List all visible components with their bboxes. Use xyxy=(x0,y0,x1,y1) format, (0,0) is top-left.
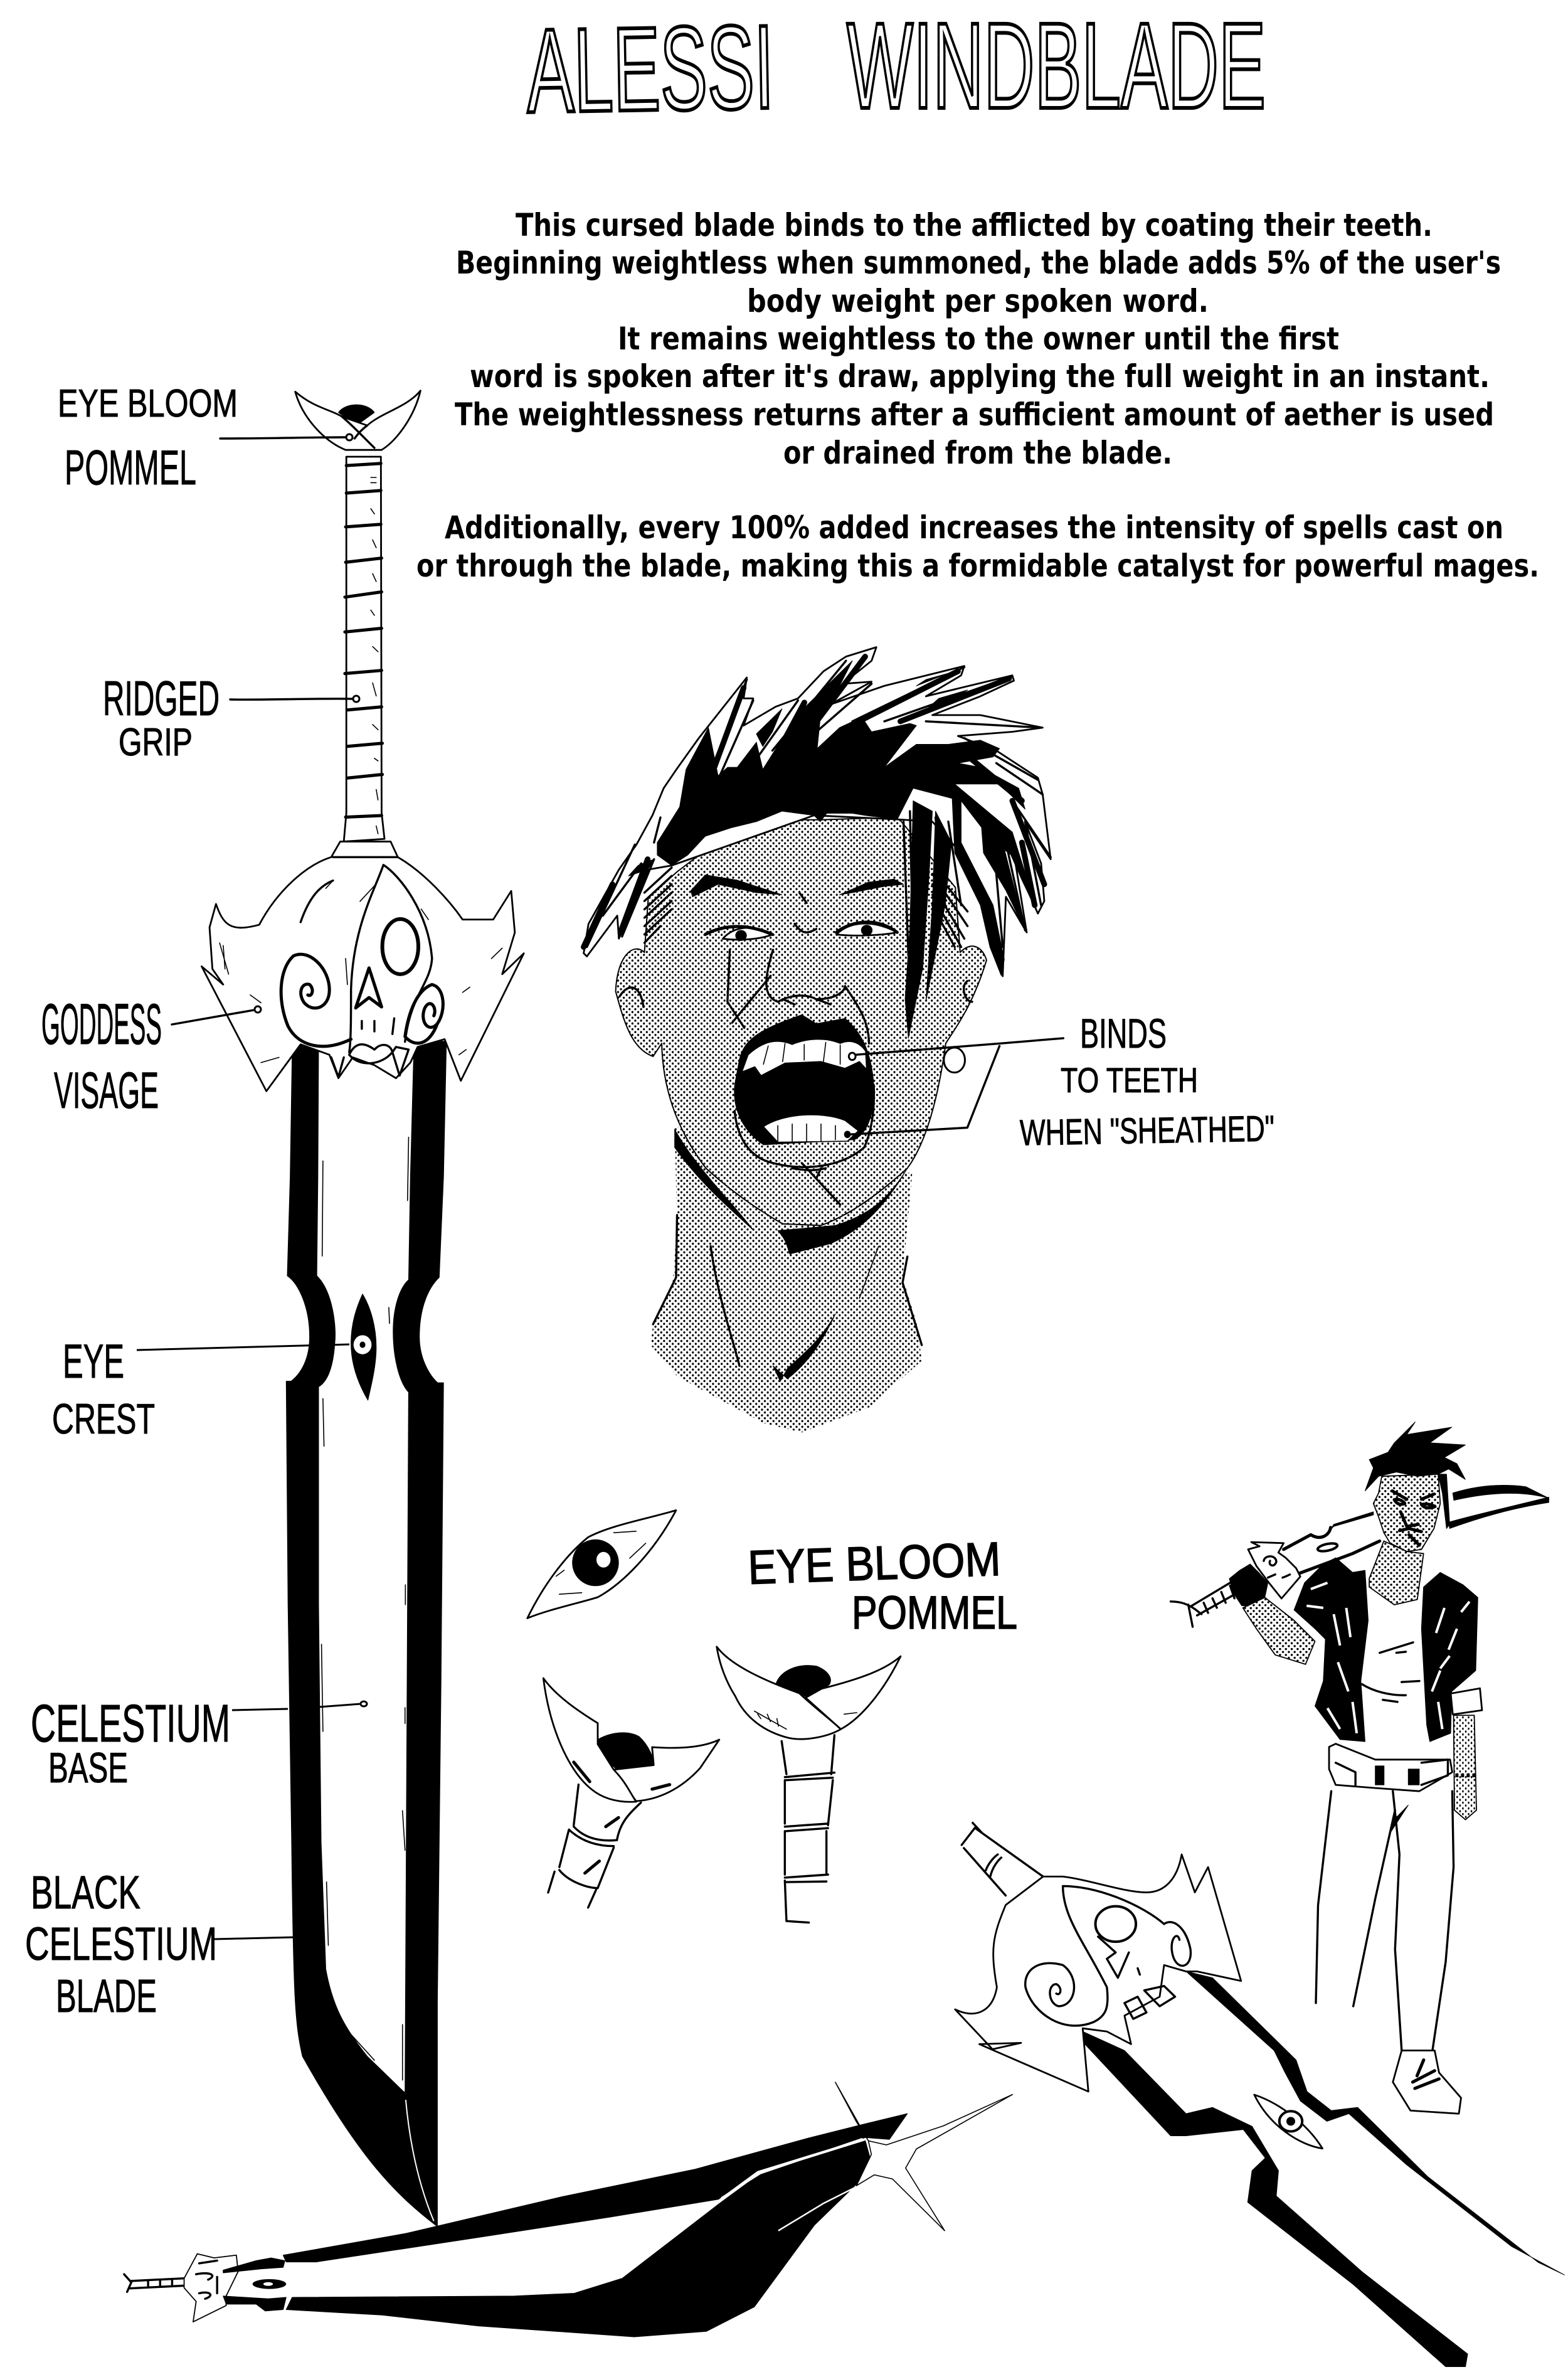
forearm skin xyxy=(1454,1715,1476,1820)
hair envelope xyxy=(584,647,1051,976)
raised arm skin xyxy=(1243,1597,1315,1664)
blade lower hooked edge xyxy=(286,1381,443,2226)
sleeve cuff xyxy=(1451,1688,1482,1715)
legs xyxy=(1316,1791,1454,2050)
label: binds to teeth when sheathed: WHEN "SHEATHED" xyxy=(1020,1108,1275,1154)
leader: grip xyxy=(230,696,359,702)
label: eye bloom pommel: EYE BLOOM xyxy=(58,382,238,425)
base scratches xyxy=(322,1137,408,2080)
standing character upper body xyxy=(1229,1422,1549,1742)
shaved side hatching xyxy=(645,868,968,947)
horizontal sword with star glint xyxy=(124,2082,1012,2337)
title xyxy=(526,0,1266,138)
sword grip in hand xyxy=(1170,1576,1247,1627)
sword guard xyxy=(1248,1542,1300,1598)
eye crest xyxy=(351,1294,376,1400)
lower teeth xyxy=(763,1115,859,1142)
label: black celestium blade: BLACK xyxy=(31,1866,140,1918)
star glint xyxy=(835,2082,1012,2231)
label: binds to teeth when sheathed xyxy=(1020,1010,1275,1154)
text block: description: body weight per spoken word. xyxy=(747,283,1209,319)
text: GODDESS xyxy=(41,992,162,1056)
label: goddess visage: VISAGE xyxy=(54,1062,159,1119)
wrist beads xyxy=(1455,1774,1476,1777)
eye bloom studies xyxy=(527,1510,901,1923)
heavy hair strokes xyxy=(584,657,1044,947)
label: ridged grip: RIDGED xyxy=(103,671,220,726)
text block: description: It remains weightless to the owner until the first xyxy=(618,321,1339,357)
ear lines xyxy=(620,981,972,1007)
left eyebrow xyxy=(691,875,782,897)
mini crest eye xyxy=(253,2279,286,2289)
text block: description xyxy=(416,207,1539,584)
guard mask line xyxy=(1063,1886,1164,2022)
gloved hand xyxy=(1229,1564,1268,1606)
side hair xyxy=(1438,1474,1449,1528)
right hanging strands xyxy=(905,784,1038,1038)
skull eye xyxy=(1096,1907,1136,1942)
standing character lower body xyxy=(1170,1576,1476,2114)
mini hilt xyxy=(124,2254,286,2322)
left swirl xyxy=(281,954,351,1046)
neck shadow under jaw xyxy=(675,1129,908,1254)
skin: neck xyxy=(650,1127,922,1432)
label: binds to teeth when sheathed: BINDS xyxy=(1080,1010,1167,1056)
leader: binds to teeth xyxy=(844,1038,1063,1138)
grip xyxy=(344,457,384,841)
black hair mass xyxy=(657,661,1025,866)
label: eye bloom pommel: POMMEL xyxy=(65,440,196,495)
right eyebrow xyxy=(840,879,904,895)
upper blade xyxy=(283,2114,908,2262)
label: eye crest: CREST xyxy=(52,1395,155,1443)
hair sketch lines xyxy=(587,661,1051,955)
leader: black blade xyxy=(215,1937,294,1939)
label: ridged grip xyxy=(103,671,220,764)
shirt lines xyxy=(1362,1642,1419,1702)
lower blade edge xyxy=(1083,2031,1468,2366)
blade right black edge upper xyxy=(393,1041,447,1392)
leader: celestium base xyxy=(232,1701,367,1710)
label: eye bloom pommel study xyxy=(747,1533,1017,1639)
upper teeth xyxy=(742,1040,867,1076)
head portrait xyxy=(616,817,1063,1432)
facial features xyxy=(1392,1491,1435,1545)
label: celestium base xyxy=(31,1694,230,1792)
nose and facial lines xyxy=(728,893,869,1043)
shouldered blade xyxy=(1284,1485,1549,1575)
label: black celestium blade: CELESTIUM xyxy=(25,1918,217,1970)
label: eye crest xyxy=(52,1335,155,1443)
upper blade edge xyxy=(1186,1971,1564,2275)
swirls xyxy=(1025,1963,1094,2026)
earring xyxy=(944,1048,965,1073)
blade tip highlight xyxy=(406,2100,434,2221)
label: ridged grip: GRIP xyxy=(119,721,193,764)
hilt: ridged grip, guard and pommel xyxy=(201,391,524,1091)
eye bloom pommel xyxy=(295,391,420,450)
skull eye socket xyxy=(383,919,418,974)
jacket left xyxy=(1294,1558,1368,1742)
label: goddess visage xyxy=(41,992,162,1119)
pommel study upright xyxy=(717,1647,901,1923)
label: celestium base: BASE xyxy=(48,1744,128,1792)
goddess visage guard xyxy=(201,841,524,1091)
main sword blade xyxy=(286,1041,447,2226)
label: eye bloom pommel study: EYE BLOOM xyxy=(747,1533,1002,1595)
jacket highlights xyxy=(1306,1583,1470,1733)
right swirl xyxy=(405,984,443,1043)
label: binds to teeth when sheathed: TO TEETH xyxy=(1061,1060,1198,1100)
label: black celestium blade xyxy=(25,1866,217,2022)
grip xyxy=(961,1823,1043,1896)
skin: face and ears xyxy=(616,817,987,1225)
mouth xyxy=(734,1015,874,1145)
lower blade xyxy=(286,2141,871,2337)
leader: pommel xyxy=(220,434,352,440)
title: WINDBLADE xyxy=(847,0,1266,134)
label: eye crest: EYE xyxy=(63,1335,124,1388)
face xyxy=(1374,1474,1440,1551)
large sword study lower right xyxy=(955,1823,1564,2366)
label: black celestium blade: BLADE xyxy=(56,1970,157,2022)
pommel study tilted xyxy=(543,1678,719,1908)
label: eye bloom pommel study: POMMEL xyxy=(852,1587,1017,1639)
tooth marks xyxy=(763,1043,840,1141)
neck lines xyxy=(653,1215,922,1366)
upper strand fills xyxy=(628,673,968,876)
neck xyxy=(1369,1541,1424,1605)
loose eye study xyxy=(527,1510,676,1618)
jaw and chin lines xyxy=(734,1085,874,1205)
shoe xyxy=(1393,2050,1461,2114)
title: ALESSI xyxy=(526,1,775,138)
leader: goddess xyxy=(172,1006,261,1024)
skull nose xyxy=(356,968,381,1008)
blade highlight xyxy=(721,2139,877,2231)
guard outline xyxy=(955,1854,1241,2092)
blade left black edge upper xyxy=(286,1041,335,1386)
label: celestium base: CELESTIUM xyxy=(31,1694,230,1753)
hair xyxy=(1365,1422,1465,1491)
belt xyxy=(1329,1744,1452,1791)
leader: eye crest xyxy=(137,1344,349,1350)
text block: description: or drained from the blade. xyxy=(783,435,1172,471)
right eye xyxy=(837,922,897,936)
hair and eyes xyxy=(584,647,1051,1038)
blade eye xyxy=(1254,2095,1323,2149)
left eye xyxy=(705,927,773,941)
jacket right xyxy=(1421,1572,1478,1742)
label: eye bloom pommel xyxy=(58,382,238,495)
skull teeth xyxy=(1125,1968,1175,2019)
skull teeth xyxy=(331,1018,408,1077)
